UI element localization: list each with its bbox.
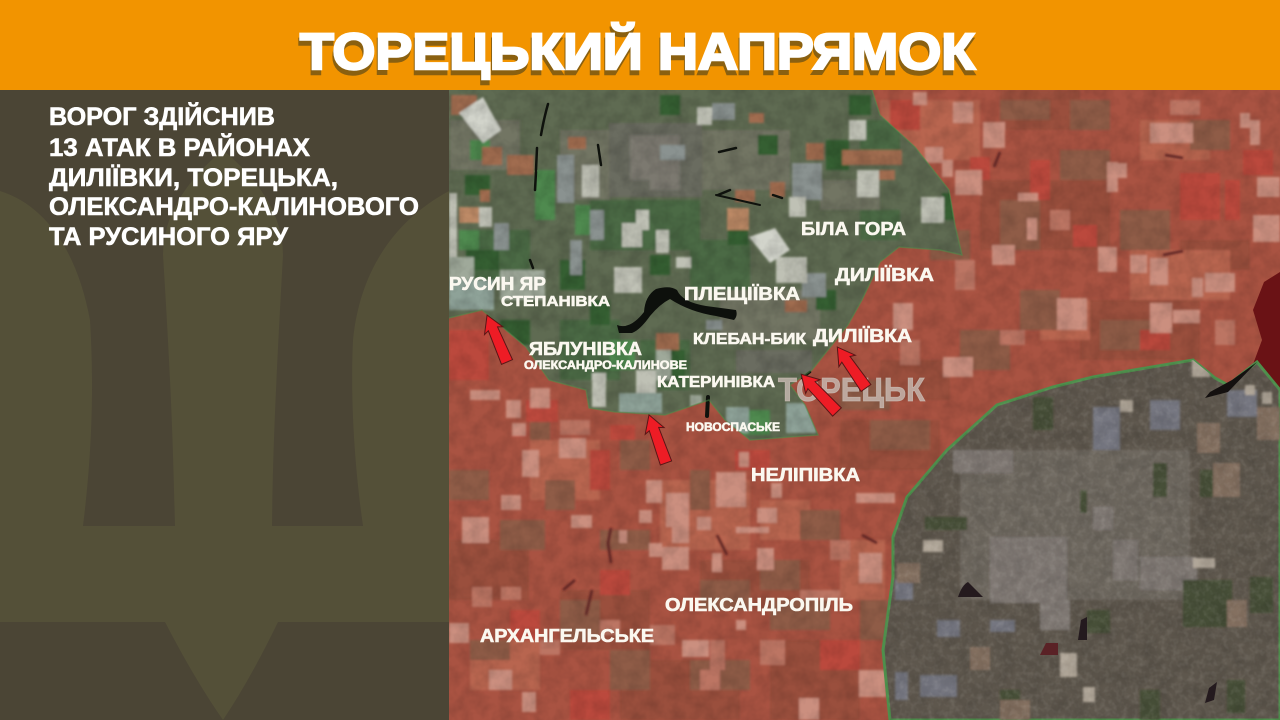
title: ТОРЕЦЬКИЙ НАПРЯМОК bbox=[299, 27, 975, 85]
place labels: ОЛЕКСАНДРОПІЛЬ bbox=[665, 595, 853, 615]
place labels: ПЛЕЩІЇВКА bbox=[684, 284, 800, 304]
place labels: АРХАНГЕЛЬСЬКЕ bbox=[480, 626, 654, 646]
place labels: ДИЛІЇВКА bbox=[835, 265, 934, 285]
place labels: БІЛА ГОРА bbox=[801, 219, 906, 239]
dark reservoirs bbox=[958, 362, 1257, 703]
reservoir at right edge bbox=[1252, 272, 1280, 395]
arrow: Dyliivka attack bbox=[836, 346, 872, 392]
place labels: КЛЕБАН-БИК bbox=[693, 331, 807, 348]
place labels: РУСИН ЯР bbox=[449, 274, 546, 294]
panel text bbox=[49, 101, 419, 251]
label: Торецьк city: ТОРЕЦЬК bbox=[778, 371, 926, 408]
place labels bbox=[449, 219, 934, 646]
place labels: ДИЛІЇВКА bbox=[813, 326, 912, 346]
arrow: Oleksandro-Kalynove attack bbox=[644, 414, 672, 466]
header band bbox=[0, 0, 1280, 90]
trident watermark bbox=[0, 150, 449, 720]
line of contact bbox=[449, 90, 962, 440]
reservoir bbox=[617, 287, 737, 333]
satellite map bbox=[449, 90, 1280, 720]
place labels: НОВОСПАСЬКЕ bbox=[686, 420, 780, 434]
panel text: 13 АТАК В РАЙОНАХ bbox=[49, 132, 310, 162]
place labels: ОЛЕКСАНДРО-КАЛИНОВЕ bbox=[524, 358, 687, 372]
place labels: ЯБЛУНІВКА bbox=[529, 339, 642, 359]
place labels: КАТЕРИНІВКА bbox=[657, 374, 775, 391]
green controlled territory bbox=[449, 90, 969, 450]
arrow: Rusyn Yar attack bbox=[484, 314, 514, 365]
place labels: СТЕПАНІВКА bbox=[501, 293, 610, 310]
left panel bbox=[0, 90, 449, 720]
dark streams in red zone bbox=[563, 152, 1183, 615]
panel text: ВОРОГ ЗДІЙСНИВ bbox=[49, 101, 275, 131]
place labels: НЕЛІПІВКА bbox=[751, 465, 860, 485]
panel text: ОЛЕКСАНДРО-КАЛИНОВОГО bbox=[49, 193, 419, 221]
red occupied territory bbox=[449, 90, 1280, 720]
panel text: ТА РУСИНОГО ЯРУ bbox=[49, 223, 288, 251]
title: ТОРЕЦЬКИЙ НАПРЯМОК bbox=[300, 22, 976, 80]
gray area bottom right bbox=[883, 357, 1280, 720]
arrow: Toretsk attack bbox=[800, 374, 842, 417]
ponds and streams bbox=[530, 104, 810, 416]
panel text: ДИЛІЇВКИ, ТОРЕЦЬКА, bbox=[49, 164, 338, 192]
